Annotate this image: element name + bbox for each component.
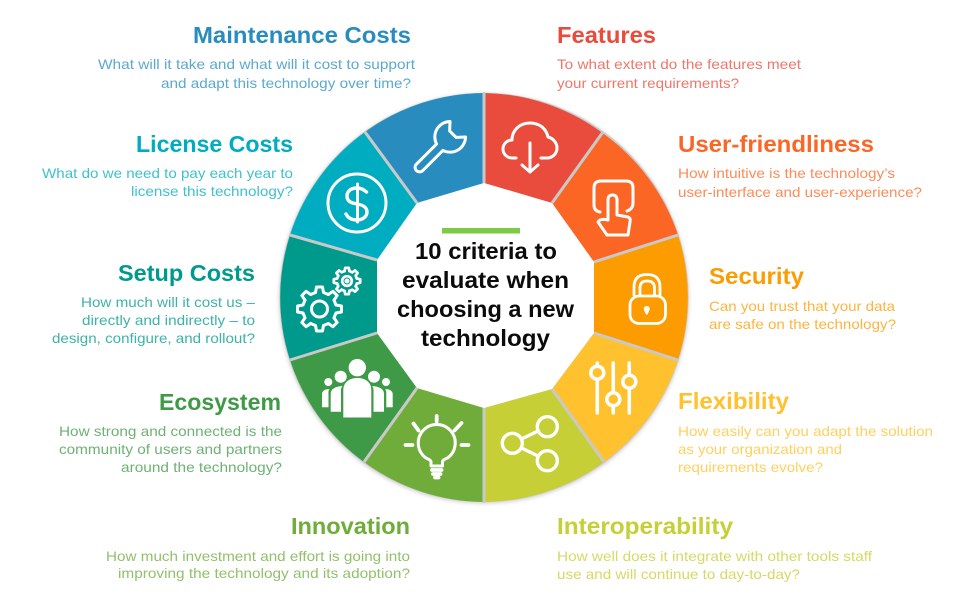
icon: touch screen hand (594, 181, 633, 235)
segment: ecosystem (290, 333, 417, 462)
text block: flexibility: as your organization and (678, 441, 842, 457)
text block: flexibility (678, 388, 933, 475)
text block: ecosystem (59, 389, 282, 475)
icon: padlock (630, 274, 666, 324)
text block: user-friendliness: How intuitive is the technology’s (678, 165, 895, 181)
text block: setup costs: Setup Costs (118, 260, 255, 286)
icon: share nodes (502, 417, 557, 471)
segment: security (594, 235, 688, 360)
text block: interoperability: How well does it integrate with other tools staff (557, 548, 872, 564)
centre decagon (377, 183, 594, 408)
icon: cloud download (503, 123, 557, 172)
text block: user-friendliness: user-interface and user-experience? (678, 184, 922, 200)
icon: gears (298, 268, 360, 331)
text block: maintenance costs (98, 22, 415, 91)
wheel of ten criteria (280, 92, 688, 503)
text block: setup costs: How much will it cost us – (81, 294, 255, 310)
icon: dollar coin (328, 174, 386, 232)
text block: innovation: How much investment and effort is going into (106, 548, 410, 564)
icon: light bulb (406, 416, 468, 478)
text block: innovation: improving the technology and its adoption? (118, 565, 410, 581)
text block: license costs: License Costs (136, 131, 293, 157)
text block: interoperability (557, 513, 872, 582)
text block: security: Can you trust that your data (709, 298, 895, 314)
segment: features (484, 93, 602, 203)
segment: maintenance costs (365, 93, 484, 203)
text block: maintenance costs: What will it take and what will it cost to support (98, 56, 415, 72)
text block: flexibility: requirements evolve? (678, 459, 823, 475)
text block: ecosystem: How strong and connected is the (59, 423, 282, 439)
text block: security: Security (709, 263, 804, 289)
text block: interoperability: use and will continue to day-to-day? (557, 566, 800, 582)
icon: group of people (322, 359, 393, 418)
text block: interoperability: Interoperability (557, 513, 733, 539)
text block: user-friendliness: User-friendliness (678, 131, 874, 157)
centre title: technology (421, 325, 550, 351)
text block: features: Features (557, 22, 656, 48)
text block: license costs: license this technology? (131, 183, 293, 199)
centre title (397, 238, 575, 351)
text block: license costs: What do we need to pay each year to (42, 165, 293, 181)
icon: wrench (406, 118, 469, 181)
segment: setup costs (280, 235, 377, 360)
text block: setup costs: design, configure, and rollout? (52, 330, 255, 346)
text block: innovation (106, 513, 410, 581)
segment: interoperability (484, 389, 604, 502)
segment: flexibility (552, 333, 678, 462)
text block: features: your current requirements? (557, 75, 739, 91)
text block: user-friendliness (678, 131, 922, 200)
centre title: choosing a new (397, 296, 575, 322)
text block: flexibility: Flexibility (678, 388, 789, 414)
text block: license costs (42, 131, 293, 199)
icon: sliders (591, 363, 636, 413)
text block: security: are safe on the technology? (709, 316, 896, 332)
text block: flexibility: How easily can you adapt the solution (678, 423, 933, 439)
segment: innovation (364, 388, 484, 502)
text block: innovation: Innovation (291, 513, 410, 539)
text block: maintenance costs: and adapt this technology over time? (161, 75, 411, 91)
text block: setup costs: directly and indirectly – to (82, 312, 255, 328)
segment: user-friendliness (552, 133, 678, 262)
text block: ecosystem: community of users and partners (59, 441, 282, 457)
text block: ecosystem: Ecosystem (159, 389, 281, 415)
text block: maintenance costs: Maintenance Costs (193, 22, 411, 48)
text block: features (557, 22, 801, 91)
centre title: 10 criteria to (415, 238, 557, 264)
text block: ecosystem: around the technology? (121, 459, 282, 475)
text block: features: To what extent do the features meet (557, 56, 801, 72)
text block: security (709, 263, 896, 332)
text block: setup costs (52, 260, 255, 346)
segment: license costs (290, 132, 417, 260)
centre title: evaluate when (402, 267, 569, 293)
centre accent bar (442, 228, 520, 234)
